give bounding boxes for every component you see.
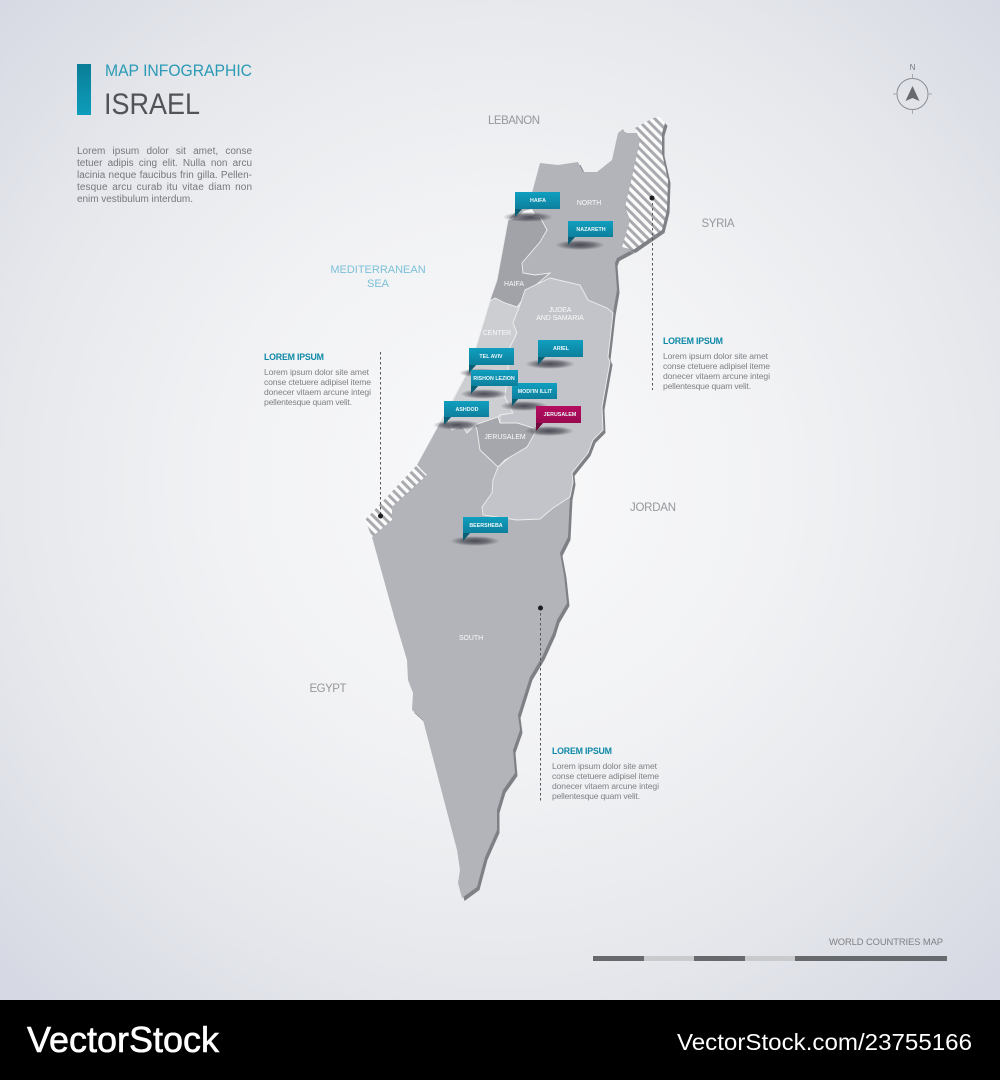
callout: South text: pellentesque quam velit.	[552, 791, 640, 801]
region labels: CENTER	[483, 330, 511, 337]
icon: compass: N	[910, 63, 916, 72]
region labels: JUDEA	[549, 307, 572, 314]
pin: Nazareth: NAZARETH	[576, 227, 606, 233]
pin: Rishon Lezion	[460, 370, 518, 399]
intro text block: tesque arcu curab itu vitae diam non	[77, 182, 252, 193]
callout: Gaza text: LOREM IPSUM	[264, 352, 324, 362]
region labels: SOUTH	[459, 635, 483, 642]
callout: South text	[552, 746, 659, 801]
region labels: HAIFA	[504, 281, 524, 288]
pin: Ashdod	[433, 401, 489, 430]
region labels: JERUSALEM	[484, 434, 526, 441]
callout: Golan text: donecer vitaem arcune integi	[663, 371, 770, 381]
pin: Haifa: HAIFA	[530, 198, 546, 204]
callout: Gaza text: donecer vitaem arcune integi	[264, 387, 371, 397]
callout: Golan text: Lorem ipsum dolor site amet	[663, 351, 769, 361]
intro text block: tetuer adipis cing elit. Nulla non arcu	[77, 158, 252, 169]
region labels	[459, 200, 601, 642]
pin: Ariel	[525, 340, 583, 369]
callout: South leader line	[538, 606, 543, 801]
pin: Jerusalem: JERUSALEM	[544, 412, 577, 418]
footer logo: VectorStock	[27, 1019, 220, 1060]
callout: South text: Lorem ipsum dolor site amet	[552, 761, 658, 771]
pin: Beersheba	[450, 517, 508, 546]
pin: Jerusalem	[524, 406, 581, 436]
map extrusion shadow	[368, 120, 670, 901]
title: ISRAEL	[104, 88, 200, 121]
sea label: Mediterranean Sea: MEDITERRANEAN	[330, 264, 426, 276]
region: Haifa bay	[516, 209, 535, 219]
region: Golan hatched	[622, 117, 668, 250]
country label: Egypt: EGYPT	[310, 683, 346, 695]
callout: South text: donecer vitaem arcune integi	[552, 781, 659, 791]
callout: Gaza text: conse ctetuere adipisel iteme	[264, 377, 371, 387]
region labels: NORTH	[577, 200, 601, 207]
callout: Gaza text: pellentesque quam velit.	[264, 397, 352, 407]
pin: Tel Aviv: TEL AVIV	[479, 354, 503, 360]
callout: Golan text: conse ctetuere adipisel iteme	[663, 361, 770, 371]
subtitle: MAP INFOGRAPHIC	[105, 62, 252, 80]
pin: Ariel: ARIEL	[553, 346, 570, 352]
scale bar	[593, 956, 947, 961]
pin: Ashdod: ASHDOD	[456, 407, 479, 413]
region: South and North base	[372, 129, 640, 898]
callout: Golan text: pellentesque quam velit.	[663, 381, 751, 391]
pin: Haifa	[503, 192, 560, 222]
callout: Golan text	[663, 336, 770, 391]
callout: Gaza text: Lorem ipsum dolor site amet	[264, 367, 370, 377]
region: Jerusalem	[475, 417, 535, 467]
pin: Nazareth	[555, 221, 613, 250]
callout: South text: LOREM IPSUM	[552, 746, 612, 756]
footer url: VectorStock.com/23755166	[677, 1029, 972, 1055]
country label: Syria: SYRIA	[702, 218, 735, 230]
intro text block: enim vestibulum interdum.	[77, 194, 193, 205]
region: Center	[441, 298, 520, 433]
country label: Lebanon: LEBANON	[488, 115, 540, 127]
sea label: Mediterranean Sea: SEA	[367, 278, 390, 290]
callout: South text: conse ctetuere adipisel iteme	[552, 771, 659, 781]
map: Israel	[365, 117, 670, 901]
country label: Jordan: JORDAN	[630, 502, 676, 514]
callout: Gaza leader line	[378, 352, 383, 518]
region: Judea and Samaria	[482, 278, 613, 520]
intro text block: lacinia neque faucibus frin gilla. Pellen-	[77, 170, 252, 181]
region labels: AND SAMARIA	[536, 315, 584, 322]
region: Haifa	[490, 213, 550, 307]
callout: Golan text: LOREM IPSUM	[663, 336, 723, 346]
icon: compass	[893, 63, 932, 114]
footer bar	[0, 1000, 1000, 1080]
pin: Rishon Lezion: RISHON LEZION	[473, 376, 515, 382]
callout: Golan leader line	[650, 196, 654, 390]
intro text block: Lorem ipsum dolor sit amet, conse	[77, 146, 252, 157]
pin: Tel Aviv	[459, 348, 514, 378]
callout: Gaza text	[264, 352, 371, 407]
intro text block	[77, 146, 252, 205]
title accent bar	[77, 64, 91, 115]
pin: Modiin Illit	[500, 383, 557, 411]
pin: Beersheba: BEERSHEBA	[469, 523, 503, 529]
region: Gaza hatched	[365, 465, 427, 537]
pin: Modiin Illit: MODI'IN ILLIT	[518, 389, 553, 395]
scale caption: WORLD COUNTRIES MAP	[829, 936, 943, 947]
